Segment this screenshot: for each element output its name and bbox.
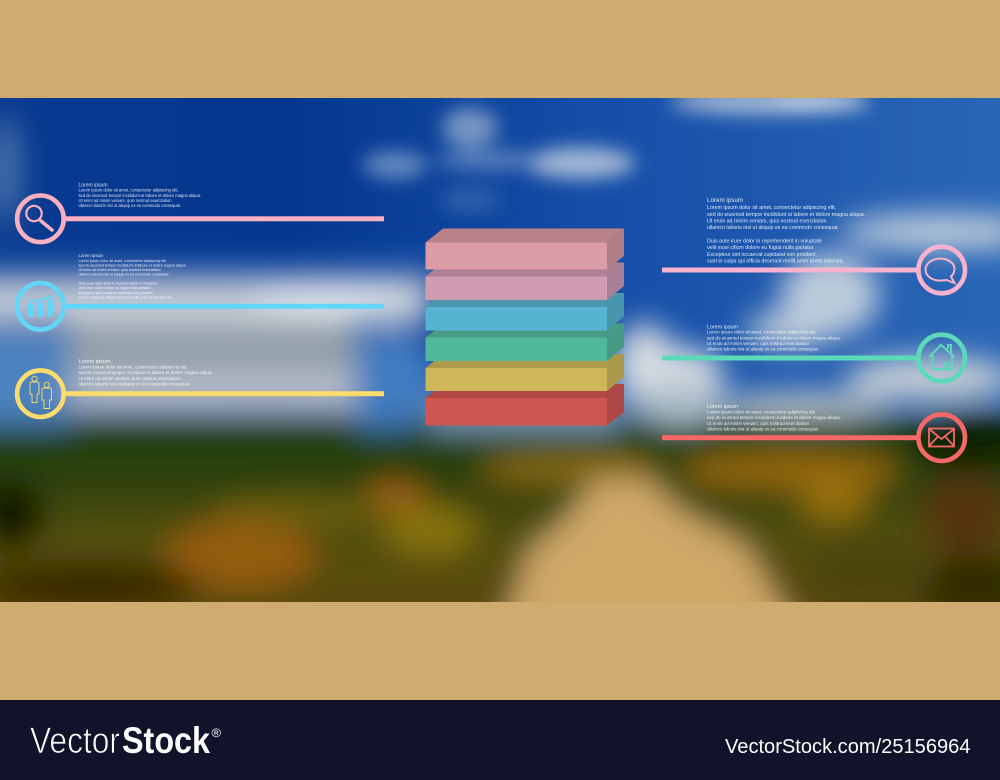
icon: bar chart [27,294,53,317]
connector line blue [64,304,384,309]
footer logo [30,720,221,761]
connector line pink [64,216,384,221]
text block: Lorem ipsum [707,324,739,330]
text block: ullamco laboris nisi ut aliquip ex ea commodo consequat. [707,225,839,231]
text block: Excepteur sint occaecat cupidatat non proident, [78,291,154,295]
right item 3: mail [662,404,965,461]
bar 5: yellow [426,354,624,391]
text block: Lorem ipsum dolor sit amet, consectetur adipiscing elit, [78,365,188,370]
text block [707,198,865,265]
connector line yellow [64,391,384,396]
connector line teal [662,356,918,360]
text block: velit esse cillum dolore eu fugiat nulla pariatur. [78,286,152,290]
text block: ullamco laboris nisi ut aliquip ex ea commodo consequat. [707,426,819,432]
left item 1: search [17,182,384,242]
text block: Excepteur sint occaecat cupidatat non proident, [707,252,817,258]
footer bar [0,700,1000,780]
footer logo: Stock [122,720,210,761]
text block: Ut enim ad minim veniam, quis nostrud exercitation [78,376,181,381]
text block: sed do eiusmod tempor incididunt ut labore et dolore magna aliqua. [707,335,841,340]
text block: Lorem ipsum dolor sit amet, consectetur adipiscing elit, [707,330,816,335]
connector line pink [662,268,918,272]
text block: Ut enim ad minim veniam, quis nostrud exercitation [78,198,172,203]
left item 3: people [17,359,384,417]
text block: Lorem ipsum [707,404,739,410]
bottom tan band [0,602,1000,700]
right item 1: speech [662,198,965,293]
top tan band [0,0,1000,98]
text block: Ut enim ad minim veniam, quis nostrud exercitation [707,219,827,225]
text block: Lorem ipsum dolor sit amet, consectetur adipiscing elit, [78,259,166,263]
text block: sed do eiusmod tempor incididunt ut labore et dolore magna aliqua. [78,193,201,198]
text block: Lorem ipsum [707,198,743,204]
text block: Duis aute irure dolor in reprehenderit in voluptate [78,282,158,286]
bar 2: mauve [426,262,624,300]
icon: two people [30,376,52,408]
text block: Lorem ipsum dolor sit amet, consectetur adipiscing elit, [78,188,178,192]
text block [78,182,201,208]
bar 6: red [426,384,624,426]
text block: Lorem ipsum [78,253,104,258]
text block: ullamco laboris nisi ut aliquip ex ea commodo consequat. [78,382,190,386]
text block [78,253,186,300]
text block: sed do eiusmod tempor incididunt ut labore et dolore magna aliqua. [707,212,865,218]
text block: Lorem ipsum dolor sit amet, consectetur adipiscing elit, [707,205,836,211]
text block: ullamco laboris nisi ut aliquip ex ea commodo consequat. [707,347,819,352]
footer image id: VectorStock.com/25156964 [725,736,970,758]
icon: envelope [929,428,954,446]
icon: speech bubble [926,258,954,283]
text block: Ut enim ad minim veniam, quis nostrud exercitation [78,268,160,272]
stacked 3D bars [426,228,624,426]
text block: ullamco laboris nisi ut aliquip ex ea commodo consequat. [78,203,181,208]
text block: Lorem ipsum [78,359,111,365]
text block: Ut enim ad minim veniam, quis nostrud exercitation [707,421,809,426]
bar 4: green [426,324,624,361]
footer logo: ® [212,726,221,740]
text block: Duis aute irure dolor in reprehenderit in voluptate [707,239,822,245]
left item 2: chart [17,253,384,330]
bar 1: pink [426,228,624,270]
text block: velit esse cillum dolore eu fugiat nulla pariatur. [707,245,814,251]
text block: Lorem ipsum [78,182,108,188]
ring yellow [17,370,64,417]
ring blue [17,283,64,330]
text block [707,404,841,432]
text block: sed do eiusmod tempor incididunt ut labore et dolore magna aliqua. [707,415,841,420]
ring pink [17,196,64,242]
ring red [918,414,965,461]
text block: Ut enim ad minim veniam, quis nostrud exercitation [707,341,809,346]
connector line red [662,435,918,440]
text block: sed do eiusmod tempor incididunt ut labore et dolore magna aliqua. [78,263,186,267]
footer logo: Vector [30,720,120,761]
blurred landscape photo background [0,98,1000,602]
ring teal [918,335,965,381]
text block: sunt in culpa qui officia deserunt mollit anim id est laborum. [78,296,172,300]
right item 2: home [662,324,965,381]
ring pink [918,247,965,293]
bar 3: blue [426,293,624,330]
text block [707,324,841,352]
text block: sed do eiusmod tempor incididunt ut labore et dolore magna aliqua. [78,370,212,375]
text block: sunt in culpa qui officia deserunt mollit anim id est laborum. [707,259,844,265]
icon: house [929,345,954,369]
text block: ullamco laboris nisi ut aliquip ex ea commodo consequat. [78,272,170,276]
text block [78,359,212,386]
icon: magnifier [26,206,52,230]
text block: Lorem ipsum dolor sit amet, consectetur adipiscing elit, [707,410,816,415]
